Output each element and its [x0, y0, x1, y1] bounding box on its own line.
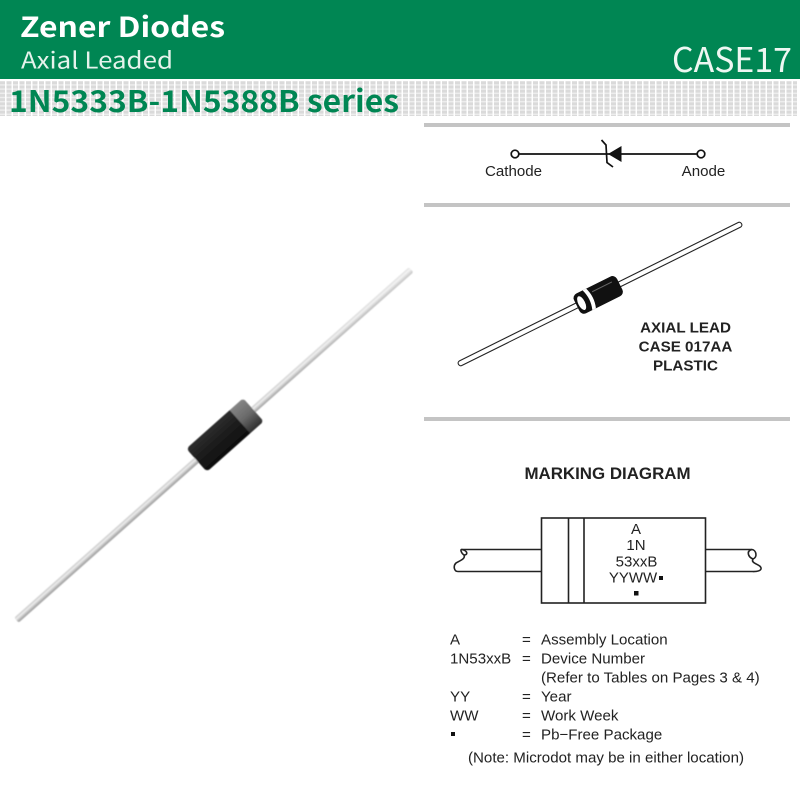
- case label: CASE17: [672, 33, 792, 82]
- marking legend: =: [522, 708, 531, 724]
- marking legend: [450, 632, 760, 766]
- marking legend: =: [522, 650, 531, 668]
- marking legend: =: [522, 632, 531, 648]
- header banner: [0, 0, 800, 82]
- package lead: [457, 221, 743, 367]
- zener schematic symbol: [485, 140, 725, 180]
- section divider lines: [424, 123, 790, 421]
- marking legend: Pb−Free Package: [541, 726, 662, 744]
- title: Zener Diodes: [20, 6, 225, 46]
- marking legend: Assembly Location: [541, 632, 668, 648]
- marking text: 53xxB: [616, 554, 657, 570]
- marking legend: =: [522, 688, 531, 706]
- marking legend: Device Number: [541, 650, 645, 668]
- marking text: YYWW: [609, 570, 658, 586]
- series heading: 1N5333B-1N5388B series: [9, 77, 399, 121]
- cathode label: Cathode: [485, 163, 542, 180]
- series band: [0, 77, 797, 121]
- package body: [572, 274, 625, 315]
- marking text: 1N: [626, 537, 646, 554]
- package caption: [639, 320, 732, 374]
- package caption: PLASTIC: [653, 358, 718, 374]
- marking legend: 1N53xxB: [450, 650, 511, 668]
- cathode band: [230, 398, 264, 433]
- product photo: axial diode: [6, 258, 421, 632]
- marking text: [609, 521, 663, 596]
- lead wire: [14, 267, 413, 623]
- marking diagram heading: MARKING DIAGRAM: [524, 464, 691, 483]
- package band: [583, 288, 598, 310]
- package caption: AXIAL LEAD: [640, 320, 731, 336]
- marking legend: (Refer to Tables on Pages 3 & 4): [541, 670, 760, 686]
- diode body: [186, 398, 264, 472]
- package caption: CASE 017AA: [639, 338, 732, 356]
- marking legend: YY: [450, 688, 470, 706]
- marking legend: A: [450, 632, 461, 648]
- marking legend: Year: [541, 688, 572, 706]
- anode label: Anode: [682, 163, 725, 180]
- axial lead package drawing: [454, 214, 746, 374]
- marking legend: WW: [450, 708, 479, 724]
- marking text: A: [631, 521, 641, 538]
- marking legend: =: [522, 726, 531, 744]
- marking legend: Work Week: [541, 708, 619, 724]
- subtitle: Axial Leaded: [21, 42, 173, 76]
- marking diagram: [454, 518, 761, 603]
- microdot note: (Note: Microdot may be in either location): [468, 750, 744, 766]
